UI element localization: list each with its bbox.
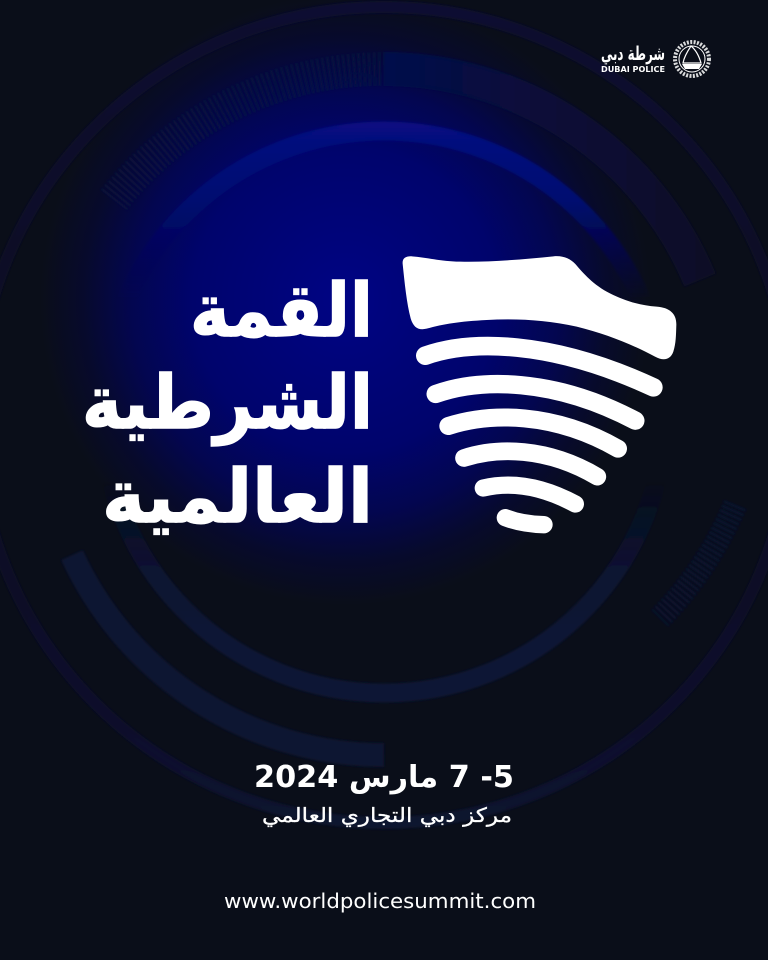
website url: www.worldpolicesummit.com [224,889,536,913]
title [82,268,373,540]
central blue glow [40,0,650,605]
title: القمة [190,268,373,354]
title: العالمية [102,454,373,540]
icon: dubai police emblem [675,42,709,76]
summit shield logo [403,256,676,525]
title: الشرطية [82,360,373,446]
inner bright ring [103,131,665,693]
dubai police logo [601,42,709,76]
event date: 5- 7 مارس 2024 [254,760,514,795]
dubai police arabic name: شرطة دبي [601,43,665,65]
venue: مركز دبي التجاري العالمي [262,803,512,828]
dubai police english name: DUBAI POLICE [601,65,665,74]
